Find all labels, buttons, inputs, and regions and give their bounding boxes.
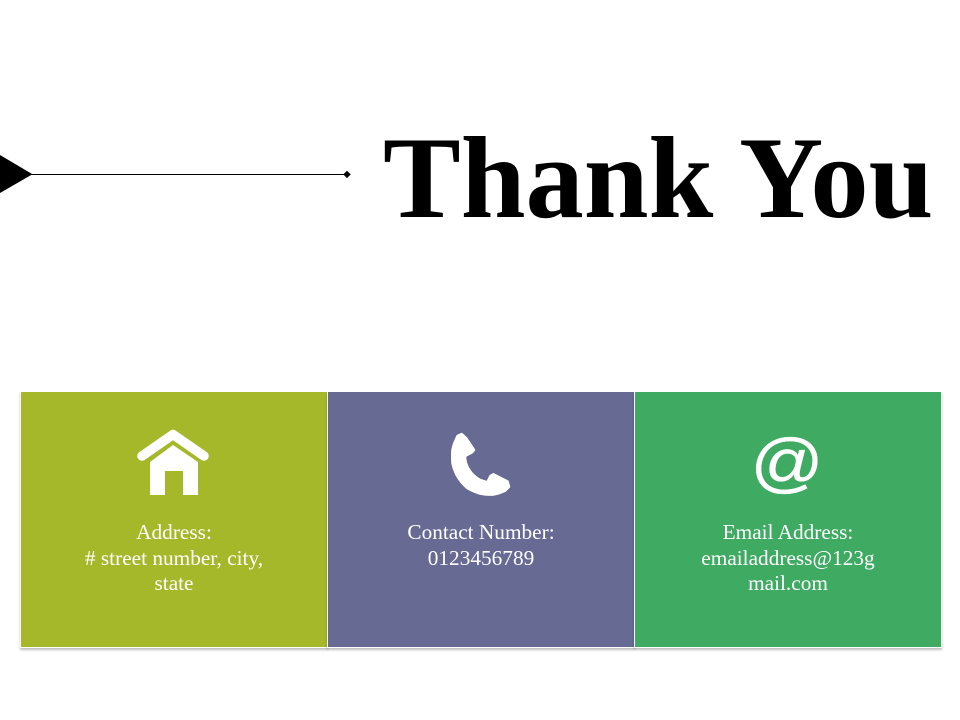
contact text: 0123456789 — [428, 546, 534, 570]
address text: state — [154, 571, 194, 595]
panel: address — [20, 391, 328, 648]
email text: emailaddress@123g — [701, 546, 875, 570]
panel: contact — [327, 391, 635, 648]
email text: Email Address: — [723, 520, 853, 544]
address text: # street number, city, — [85, 546, 263, 570]
contact text — [407, 520, 555, 570]
icon: house — [137, 430, 209, 495]
email text: mail.com — [748, 571, 828, 595]
contact text: Contact Number: — [407, 520, 555, 544]
panel: email — [634, 391, 942, 648]
icon: phone — [451, 432, 510, 496]
email text — [701, 520, 875, 595]
address text: Address: — [136, 520, 212, 544]
address text — [85, 520, 263, 595]
icon: at sign: @ — [750, 426, 824, 500]
arrow connector — [0, 155, 351, 193]
title: Thank You — [383, 114, 933, 242]
